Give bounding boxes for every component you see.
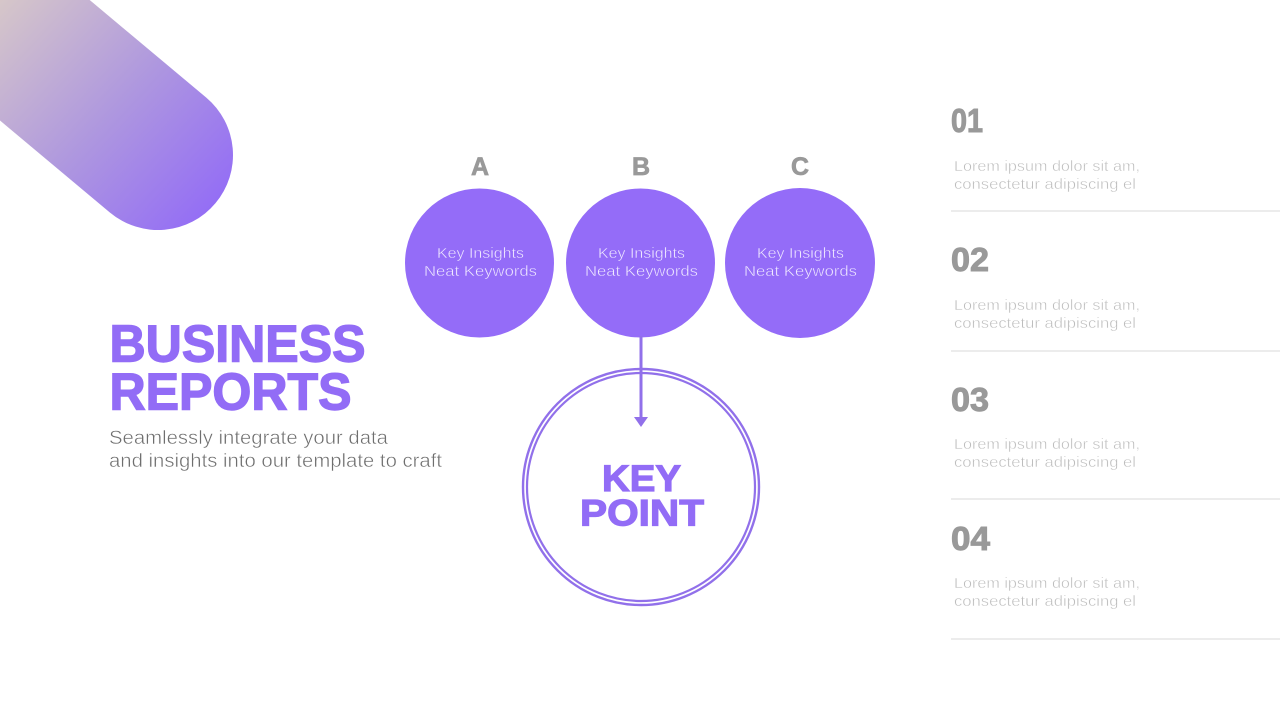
list item 03: [951, 382, 1140, 471]
decorative capsule: [0, 0, 158, 155]
label A: A: [471, 153, 489, 181]
subtitle: and insights into our template to craft: [109, 451, 443, 472]
circle C text: [744, 245, 857, 280]
circle C text: Key Insights: [757, 245, 844, 262]
number 04: 04: [951, 521, 990, 558]
number 01: 01: [951, 103, 983, 140]
heading: REPORTS: [110, 364, 352, 422]
list item 01: [951, 103, 1140, 193]
circle B text: [585, 245, 698, 280]
key point text: [580, 457, 704, 534]
text 03: Lorem ipsum dolor sit am,: [954, 436, 1140, 453]
circle B text: Neat Keywords: [585, 263, 698, 280]
text 03: consectetur adipiscing el: [954, 454, 1136, 471]
circle A text: [424, 245, 537, 280]
key point text: KEY: [602, 457, 681, 499]
text 04: consectetur adipiscing el: [954, 593, 1136, 610]
list panel: [951, 103, 1280, 640]
double ring: [523, 369, 759, 605]
number 02: 02: [951, 242, 989, 279]
list item 02: [951, 242, 1140, 332]
circle C text: Neat Keywords: [744, 263, 857, 280]
item C: [725, 153, 875, 338]
circle A text: Neat Keywords: [424, 263, 537, 280]
text 03: [954, 436, 1140, 471]
key point text: POINT: [580, 492, 704, 534]
item B: [566, 153, 715, 338]
title block: [109, 316, 443, 472]
circle A: [405, 188, 554, 338]
text 01: [954, 158, 1140, 193]
text 01: Lorem ipsum dolor sit am,: [954, 158, 1140, 175]
number 03: 03: [951, 382, 989, 419]
heading: [110, 316, 366, 422]
text 04: Lorem ipsum dolor sit am,: [954, 575, 1140, 592]
text 01: consectetur adipiscing el: [954, 176, 1136, 193]
subtitle: [109, 428, 443, 472]
text 02: Lorem ipsum dolor sit am,: [954, 297, 1140, 314]
text 02: consectetur adipiscing el: [954, 315, 1136, 332]
list item 04: [951, 521, 1140, 610]
circle B: [566, 188, 715, 338]
subtitle: Seamlessly integrate your data: [109, 428, 388, 449]
text 02: [954, 297, 1140, 332]
arrow from B to key point: [634, 336, 648, 427]
circle C: [725, 188, 875, 338]
circle B text: Key Insights: [598, 245, 685, 262]
text 04: [954, 575, 1140, 610]
key point circle: [523, 369, 759, 605]
label C: C: [791, 153, 809, 181]
heading: BUSINESS: [110, 316, 366, 374]
item A: [405, 153, 554, 338]
circle A text: Key Insights: [437, 245, 524, 262]
label B: B: [632, 153, 650, 181]
